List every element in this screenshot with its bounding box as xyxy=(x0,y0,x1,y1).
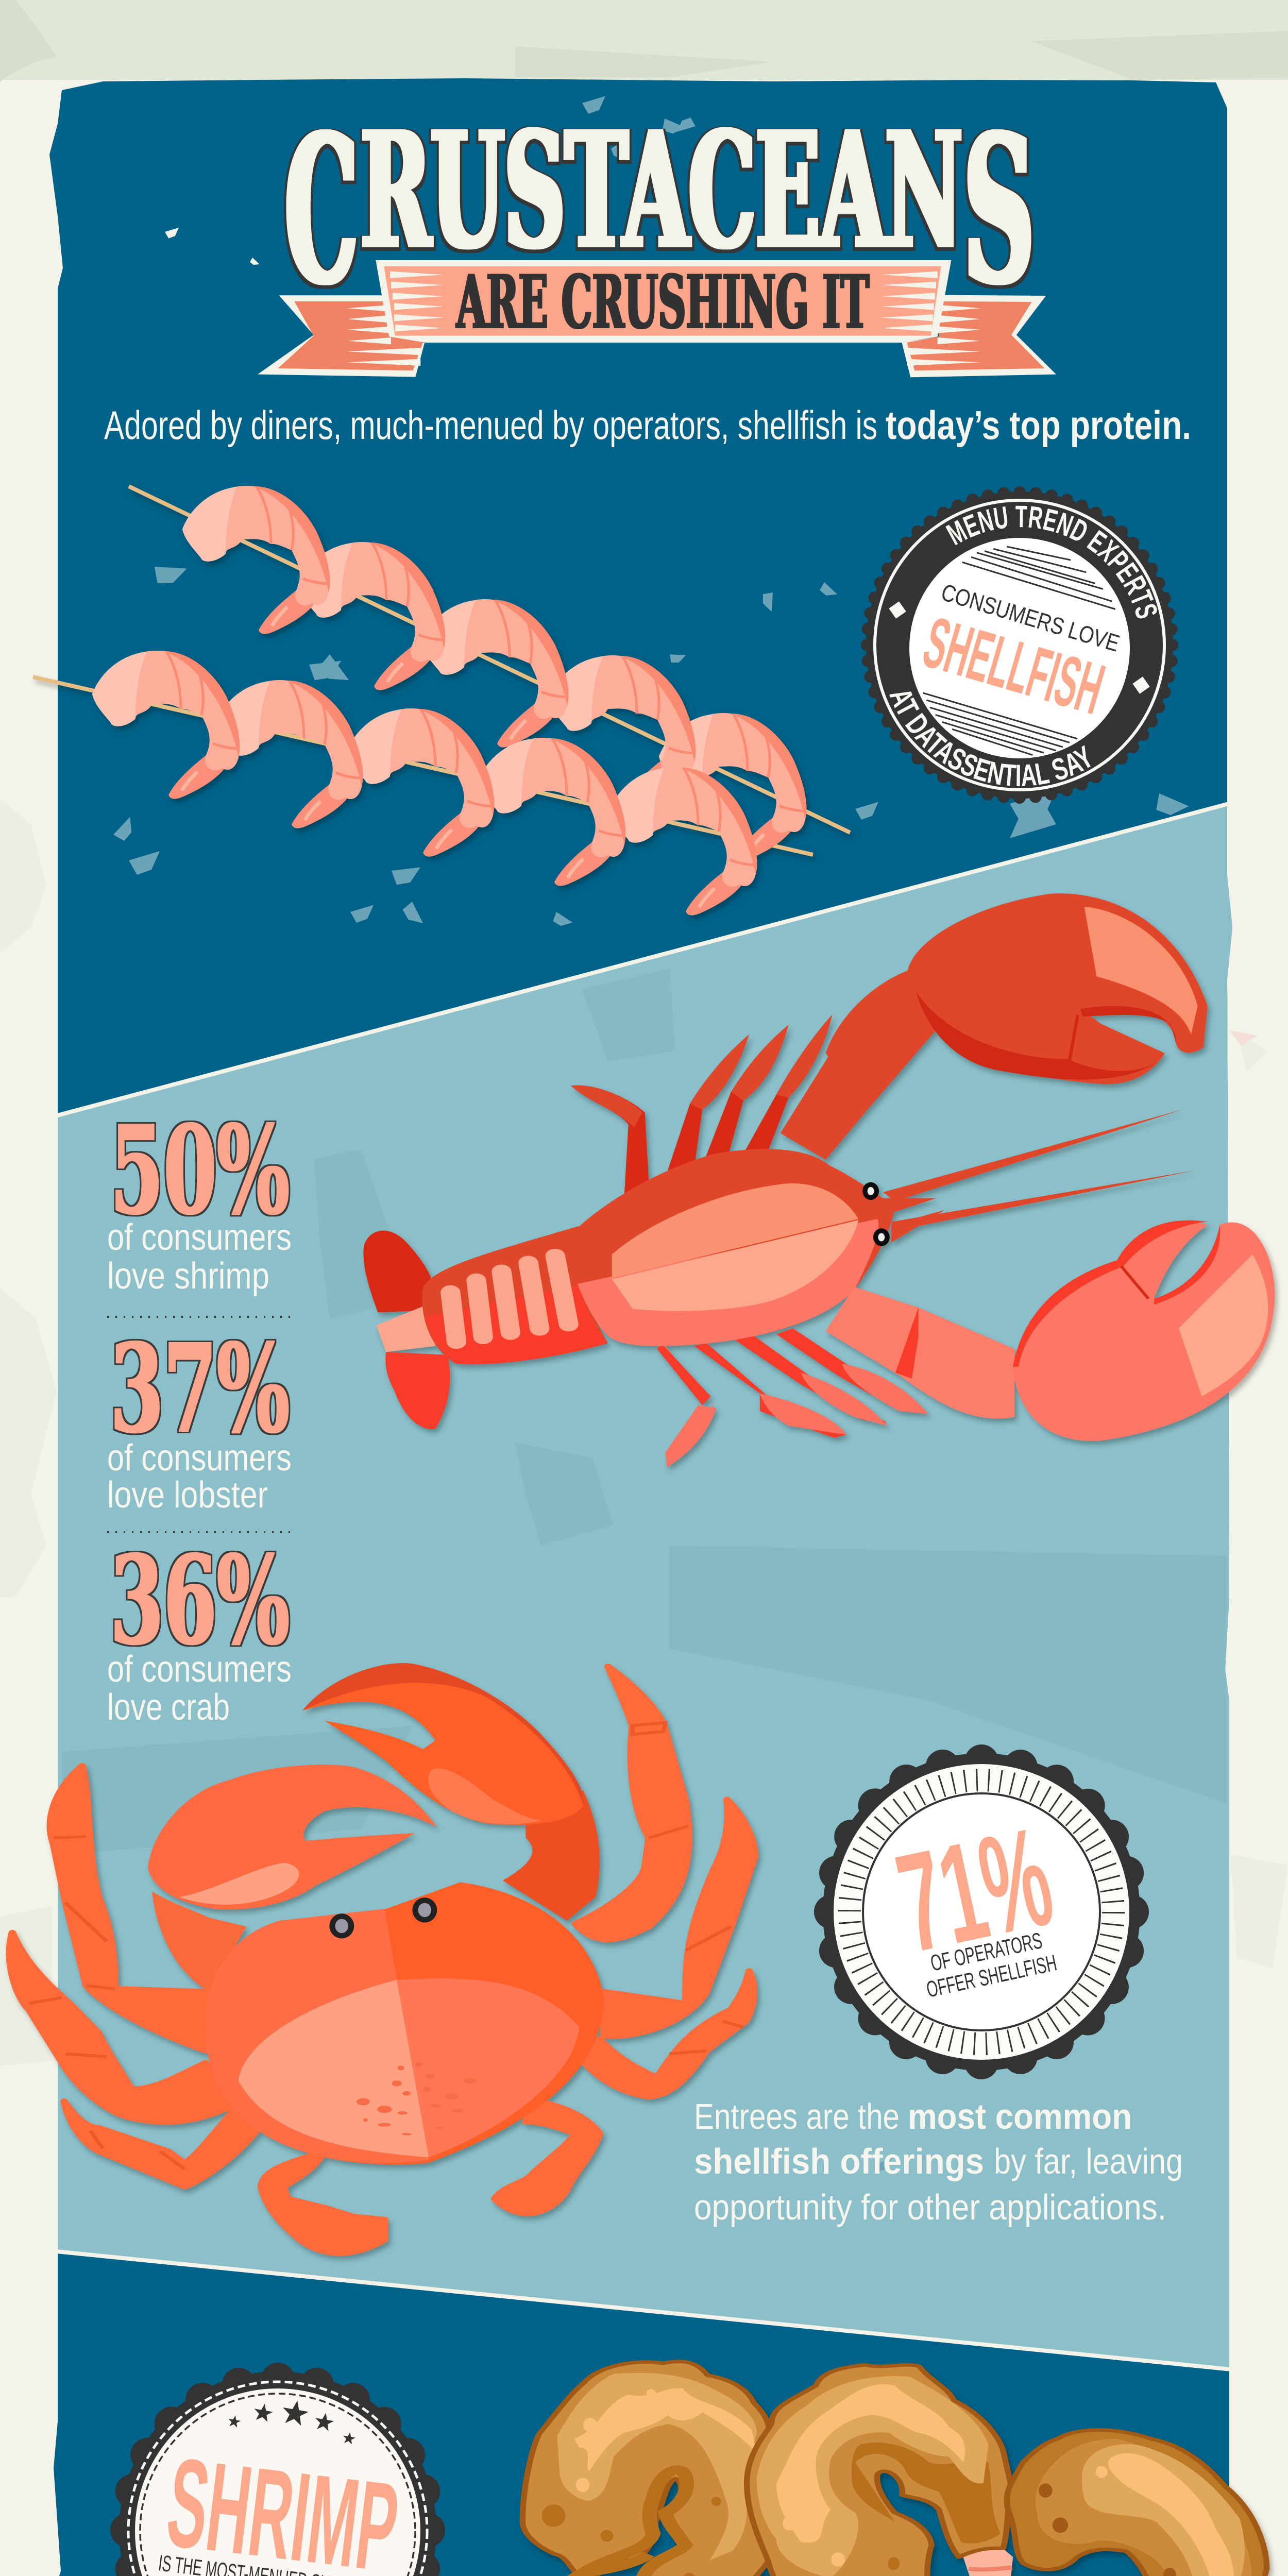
lobster tail xyxy=(363,1226,608,1429)
ribbon: are crushing it: ARE CRUSHING IT xyxy=(456,260,869,345)
text block: entrees: shellfish offerings xyxy=(694,2141,984,2181)
badge: 71 percent of operators: 71% xyxy=(886,1798,1064,1982)
stat: 50 percent love shrimp: of consumers xyxy=(107,1217,292,1258)
badge: 71 percent of operators: OF OPERATORS xyxy=(928,1928,1044,1976)
stat: 50 percent love shrimp: love shrimp xyxy=(107,1256,269,1297)
title: C xyxy=(285,91,358,330)
subtitle: today’s top protein. xyxy=(886,402,1191,448)
text: S xyxy=(963,91,1035,330)
stat: 50 percent love shrimp xyxy=(107,1098,292,1297)
badge: 71 percent of operators xyxy=(823,1753,1140,2071)
fried shrimp right xyxy=(1007,2430,1267,2576)
badge: 71 percent of operators: OFFER SHELLFISH xyxy=(924,1950,1059,2003)
badge: consumers love shellfish: CONSUMERS LOVE xyxy=(938,579,1123,657)
ribbon: are crushing it xyxy=(258,260,1056,377)
fried shrimp middle xyxy=(747,2365,1010,2576)
lobster upper arm and claw xyxy=(781,893,1208,1160)
icon: crab xyxy=(10,1663,754,2253)
stat: 37 percent love lobster: of consumers xyxy=(107,1437,292,1479)
text block: entrees: Entrees are the xyxy=(694,2096,900,2137)
subtitle: Adored by diners, much-menued by operators, shellfish is xyxy=(104,402,877,448)
icon: fried shrimp xyxy=(522,2362,1267,2576)
fried shrimp left xyxy=(522,2362,770,2576)
fried shrimp tails xyxy=(537,2543,1185,2576)
stat: 36 percent love crab: love crab xyxy=(107,1687,230,1728)
stat: 36 percent love crab: of consumers xyxy=(107,1649,292,1690)
stat: 37 percent love lobster: 37% xyxy=(110,1317,290,1460)
text block: entrees: by far, leaving xyxy=(994,2141,1183,2181)
title xyxy=(285,91,1035,330)
badge: consumers love shellfish xyxy=(861,486,1178,804)
stat: 50 percent love shrimp: 50% xyxy=(110,1098,290,1242)
stat: 36 percent love crab xyxy=(107,1529,292,1728)
badge: consumers love shellfish: MENU TREND EXPERTS xyxy=(945,506,1157,618)
lobster lower arm and claw xyxy=(825,1221,1275,1441)
crab upper claw xyxy=(302,1663,600,1921)
stat: 37 percent love lobster xyxy=(107,1317,292,1516)
crab body xyxy=(206,1882,604,2165)
stat: 37 percent love lobster: love lobster xyxy=(107,1475,268,1516)
crab lower claw xyxy=(148,1765,437,1992)
crab legs xyxy=(10,1666,754,2253)
badge: consumers love shellfish: AT DATASSENTIAL SAY xyxy=(889,691,1091,786)
text block: entrees: most common xyxy=(908,2096,1132,2137)
text block: entrees xyxy=(694,2096,1183,2227)
lobster carapace xyxy=(574,1109,1195,1467)
lobster upper legs xyxy=(571,1015,832,1195)
icon: lobster xyxy=(363,893,1275,1467)
stat: 36 percent love crab: 36% xyxy=(110,1529,290,1672)
text block: entrees: opportunity for other applications. xyxy=(694,2187,1166,2227)
badge: shrimp most-menued xyxy=(119,2371,436,2576)
shrimp skewers xyxy=(33,486,850,916)
